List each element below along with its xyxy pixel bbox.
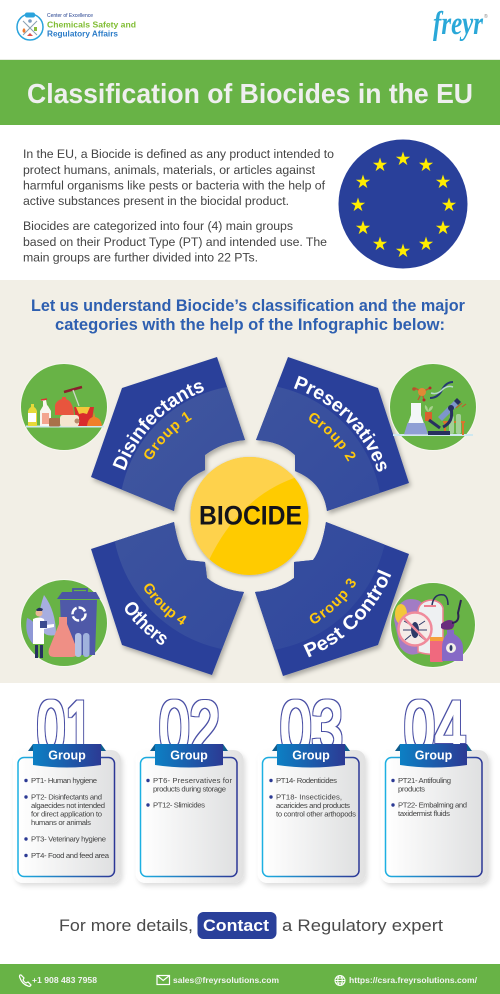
intro text: protect humans, animals, materials, or articles against (23, 163, 316, 177)
intro text: main groups are further divided into 22 PTs. (23, 250, 258, 264)
list: group 1 product types: PT4- Food and feed area (31, 851, 110, 860)
segment: Preservatives group 2 (256, 357, 413, 516)
list: group 2 product types (146, 776, 232, 810)
segment: Disinfectants group 1: Disinfectants (112, 382, 204, 470)
list: group 3 product types: PT18- Insecticides, (276, 792, 342, 802)
list: group 1 product types (24, 776, 110, 860)
segment: Others group 4: Others (125, 602, 167, 645)
ribbon: group 4: Group (415, 748, 453, 762)
icon: cleaning products (20, 364, 108, 450)
list: group 3 product types: PT14- Rodenticides (276, 776, 337, 785)
central BIOCIDE circle (180, 450, 308, 575)
call to action (59, 912, 443, 939)
card: group 4 (380, 744, 488, 883)
segment: Pest Control group 3 (255, 522, 413, 681)
card: group 3 (258, 744, 366, 883)
intro text: based on their Product Type (PT) and intended use. The (23, 235, 327, 249)
segment: Others group 4: Group 4 (144, 584, 186, 625)
intro text (23, 147, 334, 264)
ribbon: group 3: Group (292, 748, 330, 762)
logo: Chemicals Safety and Regulatory Affairs (17, 12, 136, 40)
icon: globe (335, 976, 345, 986)
list: group 4 product types (391, 776, 467, 818)
intro text: active substances present in the biocidal product. (23, 194, 289, 208)
list: group 3 product types: acaricides and products (276, 801, 350, 810)
ribbon: group 2: Group (170, 748, 208, 762)
list: group 1 product types: PT1- Human hygiene (31, 776, 97, 785)
logo: freyr: freyr (433, 6, 484, 42)
heading: infographic intro: Let us understand Biocide’s classification and the major (31, 297, 466, 315)
intro text: Biocides are categorized into four (4) main groups (23, 219, 293, 233)
list: group 4 product types: taxidermist fluids (398, 809, 450, 818)
call to action: a Regulatory expert (282, 916, 443, 935)
list: group 2 product types: products during storage (153, 784, 226, 794)
segment: Pest Control group 3: Group 3 (310, 578, 356, 624)
heading: infographic intro (31, 297, 466, 334)
segment: Pest Control group 3: Pest Control (303, 569, 392, 658)
footer contact bar (0, 964, 500, 994)
list: group 2 product types: PT6- Preservatives for (153, 776, 232, 785)
logo: Chemicals Safety and Regulatory Affairs: Chemicals Safety and (47, 20, 136, 30)
intro text: In the EU, a Biocide is defined as any product intended to (23, 147, 334, 161)
logo: freyr: ® (484, 13, 488, 20)
call to action: For more details, (59, 916, 193, 935)
list: group 1 product types: PT3- Veterinary hygiene (31, 834, 106, 844)
card: group 2 (136, 744, 244, 883)
button: Contact (198, 912, 276, 939)
list: group 2 product types: PT12- Slimicides (153, 800, 205, 810)
segment: Preservatives group 2: Group 2 (309, 413, 356, 462)
panel: biocide classification diagram (0, 280, 500, 683)
logo: Chemicals Safety and Regulatory Affairs: Center of Excellence (47, 13, 93, 19)
segment: Disinfectants group 1 (91, 357, 248, 516)
list: group 1 product types: PT2- Disinfectants and (31, 792, 102, 802)
contact: email: sales@freyrsolutions.com (173, 975, 279, 985)
ribbon: group 1: Group (48, 748, 86, 762)
icon: pest control products (390, 582, 476, 668)
contact: website: https://csra.freyrsolutions.com/ (349, 975, 478, 985)
title banner (0, 59, 500, 125)
list: group 4 product types: PT21- Antifouling (398, 776, 451, 785)
heading: infographic intro: categories with the help of the Infographic below: (55, 316, 445, 334)
icon: recycling bin and scientist (20, 580, 108, 666)
number: 04: 04 (404, 686, 466, 771)
icon: laboratory equipment (390, 364, 476, 450)
central BIOCIDE circle: BIOCIDE (199, 500, 302, 530)
contact: phone number: +1 908 483 7958 (32, 975, 97, 985)
number: 02: 02 (159, 686, 220, 771)
logo: Chemicals Safety and Regulatory Affairs: Regulatory Affairs (47, 28, 118, 38)
list: group 1 product types: algaecides not intended (31, 801, 105, 810)
list: group 4 product types: products (398, 784, 425, 794)
list: group 4 product types: PT22- Embalming and (398, 800, 467, 810)
button: Contact: Contact (203, 916, 269, 935)
card: group 1 (13, 744, 121, 883)
icon: EU flag circle (338, 140, 468, 268)
intro text: harmful organisms like pests or bacteria with the help of (23, 178, 326, 192)
segment: Disinfectants group 1: Group 1 (144, 412, 192, 460)
list: group 1 product types: humans or animals (31, 818, 91, 827)
number: 03: 03 (280, 686, 343, 771)
segment: Others group 4 (91, 522, 248, 680)
list: group 3 product types: to control other arthopods (276, 810, 356, 818)
icon: envelope (157, 976, 170, 984)
number: 01: 01 (37, 686, 93, 771)
list: group 1 product types: for direct application to (31, 810, 102, 818)
title banner: Classification of Biocides in the EU (27, 78, 473, 109)
segment: Preservatives group 2: Preservatives (294, 376, 386, 472)
list: group 3 product types (269, 776, 356, 818)
icon: phone (20, 975, 31, 986)
